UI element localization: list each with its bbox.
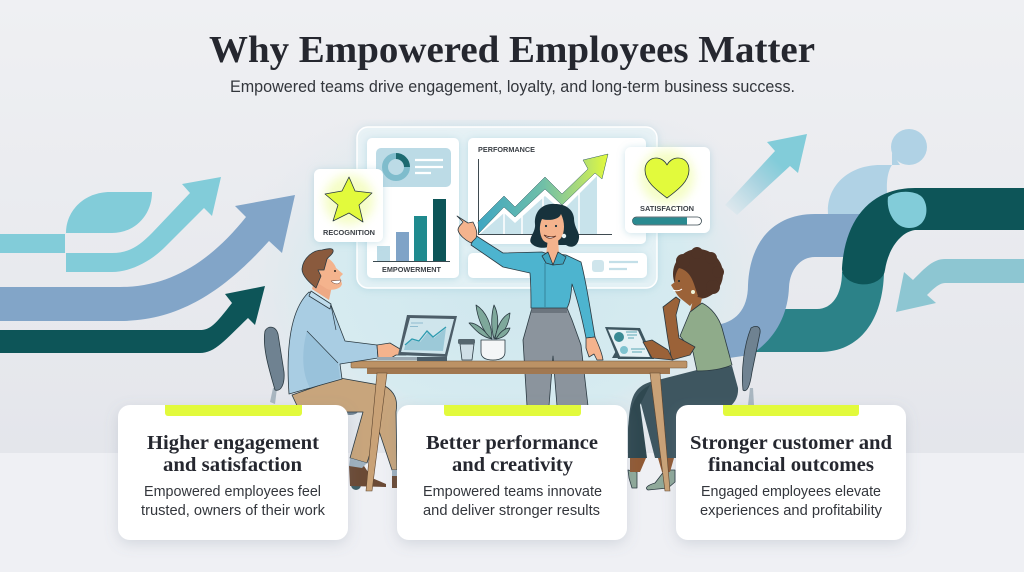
- heart icon: [640, 150, 694, 204]
- satisfaction label: SATISFACTION: [640, 204, 694, 213]
- title: Why Empowered Employees Matter: [209, 29, 815, 71]
- description: experiences and profitability: [700, 502, 882, 519]
- hair: [302, 249, 333, 288]
- small lower card: [468, 253, 647, 278]
- dashboard panel: [357, 127, 657, 288]
- accent tab: [165, 405, 302, 416]
- light arrow pointing left: [896, 259, 1024, 312]
- card: engagement: [118, 405, 348, 540]
- leaf and light arrow: [0, 177, 221, 272]
- chart area: [480, 176, 597, 234]
- heading: and satisfaction: [163, 455, 302, 476]
- bar chart: [373, 199, 450, 262]
- empowerment card: [367, 138, 459, 278]
- performance label: PERFORMANCE: [478, 145, 535, 154]
- shirt: [471, 235, 595, 338]
- tee: [680, 303, 732, 371]
- hair: [530, 204, 579, 248]
- dark teal arrow: [0, 286, 265, 353]
- table legs: [366, 373, 670, 491]
- card: performance: [397, 405, 627, 540]
- dark teal band: [842, 188, 1024, 284]
- shirt: [288, 292, 378, 394]
- blue arrow: [0, 195, 295, 321]
- trousers: [292, 378, 397, 470]
- donut widget: [376, 148, 451, 187]
- progress bar: [632, 217, 702, 225]
- pale blue figure: [828, 129, 927, 214]
- chart bar gaps: [504, 190, 579, 234]
- dark trousers: [628, 366, 738, 458]
- collar: [309, 291, 331, 309]
- laptop: [377, 315, 457, 361]
- description: and deliver stronger results: [423, 502, 600, 519]
- standing presenter: [457, 204, 603, 406]
- face: [316, 256, 343, 290]
- card: outcomes: [676, 405, 906, 540]
- face: [671, 268, 698, 306]
- resting hand: [586, 337, 603, 360]
- afro hair: [673, 247, 724, 299]
- star icon: [324, 175, 374, 225]
- fading small arrow: [725, 134, 807, 215]
- right chair: [665, 326, 760, 415]
- description: Empowered employees feel: [144, 483, 321, 500]
- description: trusted, owners of their work: [141, 502, 325, 519]
- table top: [351, 361, 687, 374]
- performance card: [468, 138, 646, 244]
- neck and face: [546, 238, 559, 265]
- recognition label: RECOGNITION: [323, 228, 375, 237]
- recognition card: [314, 169, 383, 242]
- seated man: [288, 249, 406, 488]
- pointing hand: [457, 216, 477, 243]
- chart axes: [478, 159, 612, 234]
- description: Empowered teams innovate: [423, 483, 602, 500]
- subtitle: Empowered teams drive engagement, loyalty, and long-term business success.: [230, 78, 795, 96]
- accent tab: [723, 405, 859, 416]
- chairs: [264, 326, 760, 490]
- green shoes: [628, 470, 637, 488]
- hands: [377, 343, 406, 358]
- right flowing shapes: [715, 129, 1024, 360]
- accent tab: [444, 405, 581, 416]
- heading: financial outcomes: [708, 455, 874, 476]
- brown shoes: [349, 463, 398, 488]
- rising arrow: [478, 154, 608, 233]
- heading: Better performance: [426, 433, 598, 454]
- resting hand of seated woman: [643, 340, 673, 360]
- seated woman: [628, 247, 738, 490]
- potted plant: [469, 305, 510, 360]
- light blob overlap: [888, 192, 926, 228]
- tablet: [605, 327, 654, 359]
- heading: and creativity: [452, 455, 573, 476]
- blue band: [715, 214, 870, 360]
- trousers: [523, 308, 588, 406]
- heading: Stronger customer and: [690, 433, 892, 454]
- left growth arrows: [0, 177, 295, 353]
- left chair: [264, 327, 361, 490]
- collar: [542, 252, 566, 265]
- heading: Higher engagement: [147, 433, 320, 454]
- neck: [312, 278, 332, 300]
- teal band: [755, 272, 884, 352]
- arm to chin: [663, 297, 695, 360]
- satisfaction card: [625, 147, 710, 233]
- empowerment label: EMPOWERMENT: [382, 265, 441, 274]
- description: Engaged employees elevate: [701, 483, 881, 500]
- coffee cup: [458, 339, 475, 360]
- pot: [481, 340, 505, 360]
